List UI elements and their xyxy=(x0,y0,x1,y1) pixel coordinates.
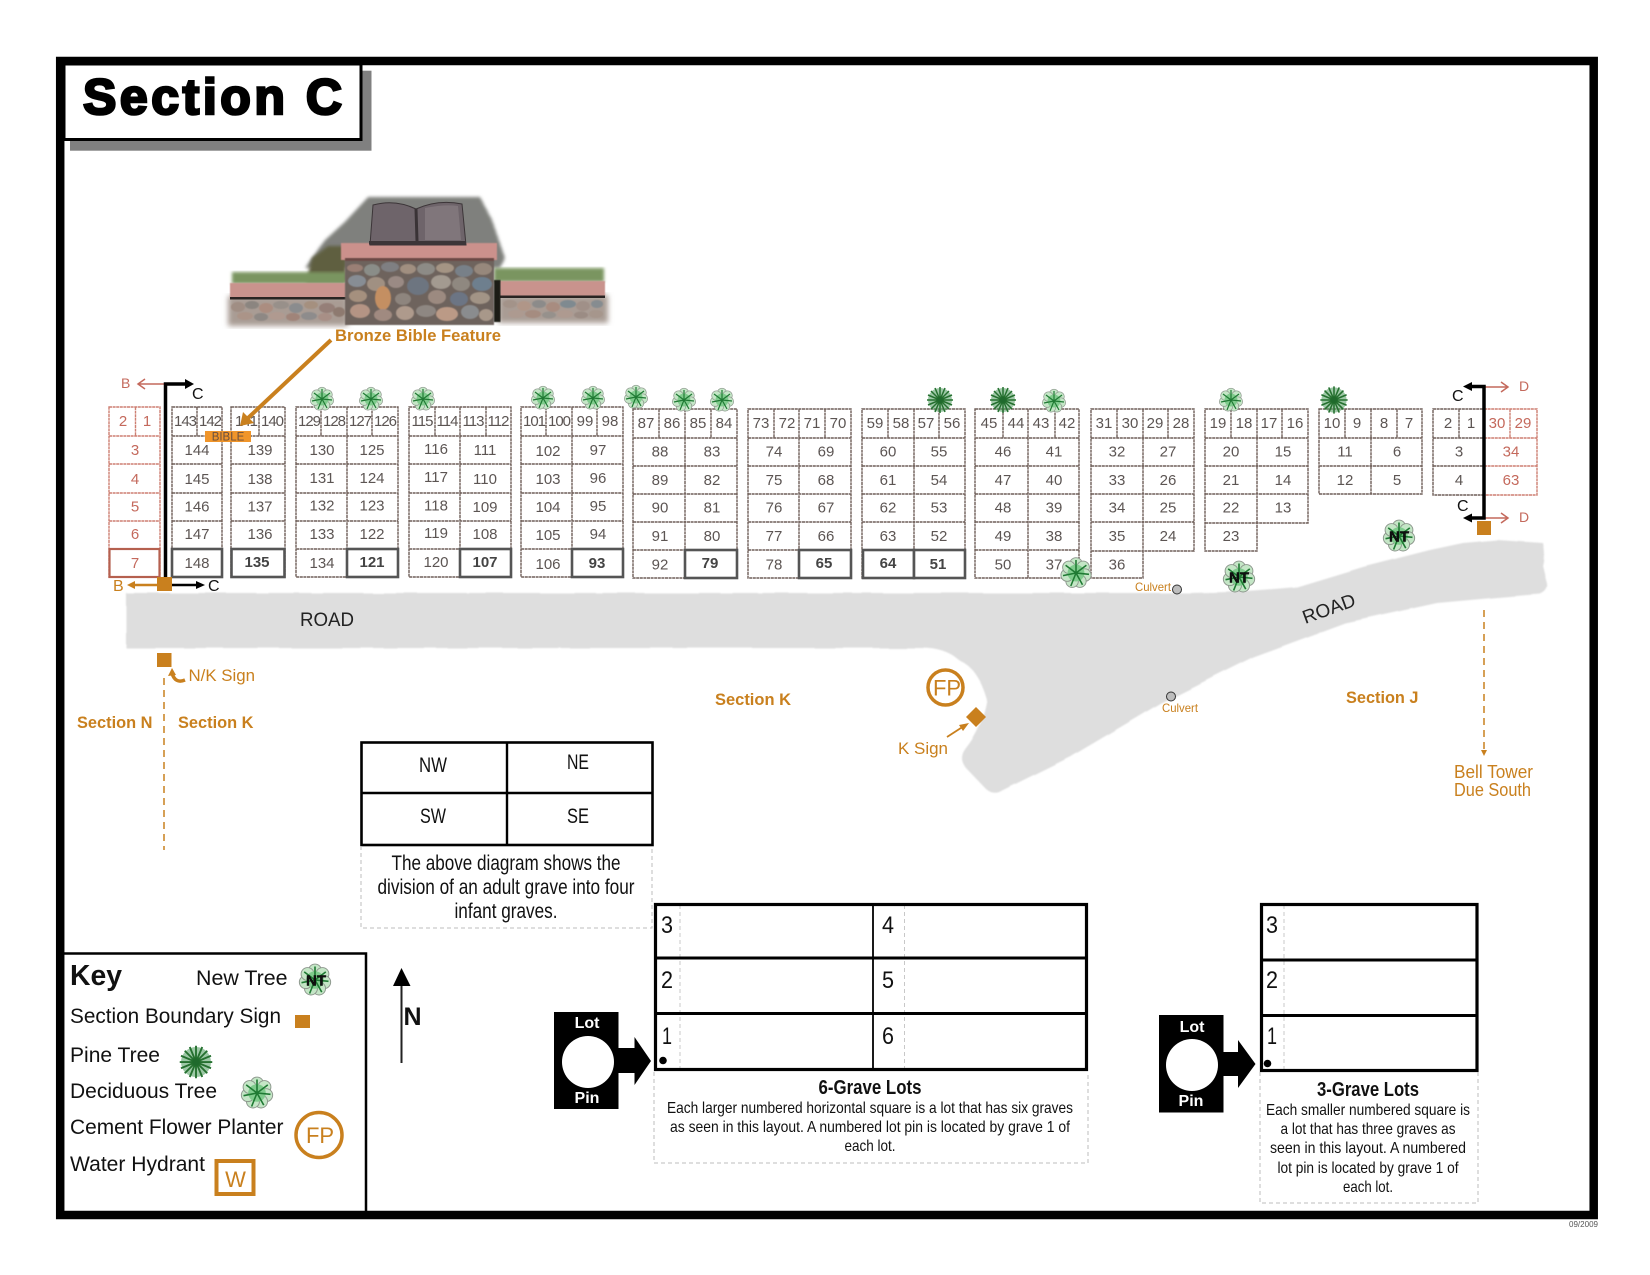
section boundary C/D right: D xyxy=(1519,509,1529,525)
lot block 93-106: 96 xyxy=(590,470,606,487)
lot block 93-106: 105 xyxy=(535,527,561,544)
lot block 65-78: 70 xyxy=(830,415,846,432)
key: water hydrant: W xyxy=(225,1167,246,1192)
3-grave lot diagram: 3 xyxy=(1266,912,1278,939)
lot block 93-106: 101 xyxy=(523,413,546,430)
lot block 65-78: 66 xyxy=(818,528,834,545)
lot block 121-134: 122 xyxy=(359,526,385,543)
section K center label: Section K xyxy=(715,691,791,709)
lot block 13-23: 15 xyxy=(1275,444,1291,461)
lot block red D lots: 30 xyxy=(1489,415,1505,432)
infant grave caption: division of an adult grave into four xyxy=(378,876,635,899)
pine tree xyxy=(990,387,1016,413)
lot block 65-78: 68 xyxy=(818,472,834,489)
lot block 107-120: 108 xyxy=(472,526,498,543)
lot pin icon, 3-grave: Lot xyxy=(1180,1019,1205,1036)
lot block: red B lots: 1 xyxy=(143,413,151,430)
title block xyxy=(64,64,372,151)
lot block 79-92: 87 xyxy=(638,415,654,432)
lot block 79-92 xyxy=(633,409,737,578)
deciduous tree xyxy=(581,386,605,409)
lot block 5-12: 12 xyxy=(1337,472,1353,489)
lot block 121-134: 121 xyxy=(359,554,385,571)
deciduous tree xyxy=(359,387,383,410)
lot block 107-120: 109 xyxy=(472,499,498,516)
pillar stones xyxy=(347,262,493,321)
sign and boundary B/C bottom: B xyxy=(113,578,124,595)
3-grave caption: seen in this layout. A numbered xyxy=(1270,1140,1466,1157)
6-grave caption: 6-Grave Lots xyxy=(818,1077,922,1099)
lot block 121-134: 123 xyxy=(359,498,385,514)
lot block 24-36: 25 xyxy=(1160,500,1176,517)
revision date: 09/2009 xyxy=(1569,1220,1599,1229)
lot block 24-36: 35 xyxy=(1109,528,1125,545)
lot block 143-148 xyxy=(172,407,222,577)
lot block 65-78: 67 xyxy=(818,500,834,517)
lot block 1-4 xyxy=(1433,409,1484,495)
photo: bronze bible feature xyxy=(228,197,608,326)
lot block 79-92: 81 xyxy=(704,500,720,517)
lot block 51-64: 57 xyxy=(918,415,934,432)
lot block 93-106: 93 xyxy=(589,555,605,572)
lot block 121-134: 129 xyxy=(298,413,321,430)
lot block 13-23: 21 xyxy=(1223,472,1239,489)
key: deciduous tree xyxy=(70,1077,273,1108)
new tree: NT xyxy=(1389,528,1409,546)
lot block 121-134: 133 xyxy=(309,526,335,543)
lot block 107-120: 118 xyxy=(424,498,448,514)
section boundary B/C top: C xyxy=(192,386,204,403)
deciduous tree xyxy=(710,388,734,411)
lot block 5-12: 7 xyxy=(1405,415,1413,432)
key: pine tree xyxy=(70,1044,212,1078)
lot block 107-120 xyxy=(409,407,511,577)
lot block 24-36: 28 xyxy=(1173,415,1189,432)
lot block 51-64: 64 xyxy=(880,555,897,572)
lot pin icon, 6-grave: Lot xyxy=(575,1015,600,1032)
3-grave caption xyxy=(1260,1072,1478,1203)
lot block 93-106: 97 xyxy=(590,442,606,459)
lot block 135-141: 135 xyxy=(244,554,270,571)
lot block 24-36: 24 xyxy=(1160,528,1176,545)
lot block 121-134: 126 xyxy=(374,413,397,430)
lot block 121-134: 132 xyxy=(309,498,335,514)
lot block 5-12: 10 xyxy=(1324,415,1340,432)
lot block 24-36: 33 xyxy=(1109,472,1125,489)
lot block 51-64: 56 xyxy=(944,415,960,432)
infant grave division diagram: SE xyxy=(567,805,589,828)
key: new tree: NT xyxy=(306,972,326,990)
section boundary B/C top xyxy=(121,375,204,581)
section K label: Section K xyxy=(178,714,254,732)
section J label: Section J xyxy=(1346,689,1418,707)
lot block 143-148: 144 xyxy=(184,442,210,459)
key: pine tree: Pine Tree xyxy=(70,1044,160,1067)
lot block 1-4: 1 xyxy=(1467,415,1475,432)
lot block 24-36: 32 xyxy=(1109,444,1125,461)
lot block 13-23: 17 xyxy=(1261,415,1277,432)
6-grave caption: as seen in this layout. A numbered lot pin is located by grave 1 of xyxy=(670,1119,1070,1136)
lot block 93-106: 98 xyxy=(602,413,618,430)
3-grave caption: each lot. xyxy=(1343,1179,1393,1196)
lot block 65-78: 69 xyxy=(818,444,834,461)
lot block 51-64: 63 xyxy=(880,528,896,545)
lot block 13-23 xyxy=(1205,409,1308,551)
lot block 24-36: 30 xyxy=(1122,415,1138,432)
lot block 107-120: 111 xyxy=(474,442,496,459)
section N label: Section N xyxy=(77,714,152,732)
deciduous tree xyxy=(310,387,334,410)
6-grave caption xyxy=(654,1072,1088,1163)
lot block 135-141: 138 xyxy=(247,471,273,488)
new tree xyxy=(1223,561,1255,592)
infant grave caption: infant graves. xyxy=(454,900,558,923)
title: Section C xyxy=(83,69,342,125)
culvert north: Culvert xyxy=(1135,580,1172,594)
road label: ROAD xyxy=(300,610,354,631)
lot block 37-50: 49 xyxy=(995,528,1011,545)
lot pin icon, 3-grave xyxy=(1159,1015,1256,1112)
key: cement flower planter: Cement Flower Planter xyxy=(70,1116,284,1139)
lot block 65-78: 71 xyxy=(804,415,820,432)
section boundary C/D right xyxy=(1452,378,1529,535)
lot block 24-36: 26 xyxy=(1160,472,1176,489)
lot block red D lots: 29 xyxy=(1515,415,1531,432)
lot block 79-92: 91 xyxy=(652,528,668,545)
lot block 79-92: 90 xyxy=(652,500,668,517)
left wall stones xyxy=(231,301,345,321)
6-grave lot diagram: 6 xyxy=(882,1023,894,1050)
bronze bible label: Bronze Bible Feature xyxy=(335,327,501,345)
lot block 51-64: 61 xyxy=(880,472,896,489)
lot block 93-106: 95 xyxy=(590,498,606,515)
bible tag: BIBLE xyxy=(212,432,245,444)
6-grave caption: each lot. xyxy=(844,1138,896,1155)
pine tree xyxy=(1320,386,1348,414)
lot block 51-64: 59 xyxy=(867,415,883,432)
flower planter FP: FP xyxy=(933,676,961,700)
key: deciduous tree: Deciduous Tree xyxy=(70,1080,217,1103)
key panel xyxy=(64,954,366,1211)
lot block 37-50: 40 xyxy=(1046,472,1062,489)
north arrow xyxy=(393,968,422,1063)
lot block 5-12: 8 xyxy=(1380,415,1388,432)
lot block 107-120: 107 xyxy=(472,554,498,571)
key: water hydrant: Water Hydrant xyxy=(70,1153,205,1176)
lot block 107-120: 116 xyxy=(424,441,448,458)
lot block 13-23: 14 xyxy=(1275,472,1291,489)
lot block 37-50: 43 xyxy=(1033,415,1049,432)
6-grave lot diagram: 4 xyxy=(882,912,894,939)
lot block 79-92: 92 xyxy=(652,556,668,573)
lot pin icon, 6-grave xyxy=(554,1012,651,1109)
arrow to bible xyxy=(240,340,331,426)
3-grave lot diagram xyxy=(1261,904,1478,1070)
bell tower direction: Due South xyxy=(1454,780,1531,800)
lot block 93-106: 99 xyxy=(577,413,593,430)
lot block 79-92: 79 xyxy=(702,555,718,572)
lot block 37-50: 46 xyxy=(995,444,1011,461)
lot block 24-36 xyxy=(1091,409,1194,578)
3-grave caption: Each smaller numbered square is xyxy=(1266,1102,1470,1119)
pine tree xyxy=(927,387,953,413)
lot block: red B lots: 2 xyxy=(119,413,127,430)
culvert south: Culvert xyxy=(1162,701,1199,715)
lot block 121-134: 130 xyxy=(309,442,335,459)
lot block 93-106: 94 xyxy=(590,526,606,543)
6-grave lot diagram xyxy=(655,904,1087,1070)
lot block 79-92: 89 xyxy=(652,472,668,489)
6-grave lot diagram: 2 xyxy=(661,967,673,994)
lot block 65-78: 72 xyxy=(779,415,795,432)
lot block red D lots: 34 xyxy=(1503,444,1519,461)
north arrow: N xyxy=(404,1003,422,1031)
key: water hydrant xyxy=(70,1153,254,1194)
lot block 1-4: 4 xyxy=(1455,472,1463,489)
new tree: NT xyxy=(1229,570,1249,586)
lot block 93-106: 100 xyxy=(548,413,571,430)
lot block 51-64: 55 xyxy=(931,444,947,461)
lot block 121-134: 128 xyxy=(323,413,346,430)
lot pin icon, 6-grave: Pin xyxy=(575,1090,599,1107)
N/K sign: N/K Sign xyxy=(188,666,255,685)
lot block 143-148: 148 xyxy=(184,555,210,572)
lot block: red B lots: 4 xyxy=(131,471,139,488)
lot block 135-141: 141 xyxy=(235,413,258,430)
deciduous tree xyxy=(411,387,435,410)
3-grave caption: a lot that has three graves as xyxy=(1280,1121,1456,1138)
lot block 13-23: 16 xyxy=(1287,415,1303,432)
section boundary B/C top: B xyxy=(121,375,130,391)
K sign marker xyxy=(898,707,986,758)
lot block 107-120: 119 xyxy=(424,525,448,542)
lot block 143-148: 143 xyxy=(174,413,197,430)
culvert south xyxy=(1162,692,1199,715)
6-grave lot diagram: 3 xyxy=(661,912,673,939)
new tree xyxy=(1383,520,1415,551)
bible tag xyxy=(205,431,251,444)
deciduous tree xyxy=(624,385,648,408)
lot block 51-64: 52 xyxy=(931,528,947,545)
lot block 79-92: 83 xyxy=(704,444,720,461)
lot block 37-50: 50 xyxy=(995,556,1011,573)
lot block 121-134: 131 xyxy=(309,470,335,487)
lot block 93-106: 102 xyxy=(535,443,561,460)
lot block 51-64 xyxy=(862,409,965,578)
lot block 65-78: 65 xyxy=(816,555,832,572)
key: new tree: New Tree xyxy=(196,967,288,990)
lot block 5-12: 11 xyxy=(1337,444,1353,461)
lot block 24-36: 36 xyxy=(1109,556,1125,573)
lot pin icon, 3-grave: Pin xyxy=(1179,1093,1203,1110)
sign and boundary B/C bottom xyxy=(113,577,220,595)
section boundary C/D right: D xyxy=(1519,378,1529,394)
lot block 13-23: 22 xyxy=(1223,500,1239,517)
lot block 121-134: 134 xyxy=(309,555,335,572)
infant grave division diagram xyxy=(361,742,652,845)
infant grave division diagram: SW xyxy=(420,805,446,828)
K sign marker: K Sign xyxy=(898,739,948,758)
lot block 107-120: 113 xyxy=(463,413,484,430)
infant grave division diagram: NW xyxy=(419,754,447,777)
key: new tree xyxy=(196,964,331,995)
lot block 65-78: 75 xyxy=(766,472,782,489)
lot block 51-64: 60 xyxy=(880,444,896,461)
lot block 121-134: 124 xyxy=(359,470,385,487)
section boundary C/D right: C xyxy=(1452,388,1464,405)
right wall stones xyxy=(503,300,603,318)
lot block 65-78: 73 xyxy=(753,415,769,432)
lot block 51-64: 58 xyxy=(893,415,909,432)
lot block 24-36: 27 xyxy=(1160,444,1176,461)
infant grave division diagram: NE xyxy=(567,751,589,774)
lot block 121-134: 127 xyxy=(349,413,372,430)
lot block 24-36: 34 xyxy=(1109,500,1125,517)
key: cement flower planter xyxy=(70,1112,342,1158)
lot block 5-12 xyxy=(1319,409,1422,494)
lot block 37-50: 41 xyxy=(1046,444,1062,461)
lot block 1-4: 2 xyxy=(1444,415,1452,432)
lot block 107-120: 112 xyxy=(488,413,509,430)
3-grave lot diagram: 1 xyxy=(1267,1023,1277,1050)
lot block 37-50: 38 xyxy=(1046,528,1062,545)
lot block 93-106: 104 xyxy=(535,499,561,516)
lot block 79-92: 85 xyxy=(690,415,706,432)
lot block 143-148: 147 xyxy=(184,526,210,543)
lot block 65-78: 76 xyxy=(766,500,782,517)
lot block 24-36: 31 xyxy=(1096,415,1112,432)
lot block: red B lots: 3 xyxy=(131,442,139,459)
lot block 37-50: 37 xyxy=(1046,556,1062,573)
deciduous tree xyxy=(672,388,696,411)
lot block 121-134 xyxy=(296,407,398,577)
road xyxy=(126,540,1547,793)
lot block 135-141: 136 xyxy=(247,526,273,543)
lot block 107-120: 114 xyxy=(437,413,458,430)
lot block 143-148: 142 xyxy=(199,413,222,430)
key heading: Key xyxy=(70,960,122,992)
lot block 24-36: 29 xyxy=(1147,415,1163,432)
lot block: red B lots: 5 xyxy=(131,498,139,516)
key: section boundary sign: Section Boundary Sign xyxy=(70,1005,281,1028)
3-grave caption: 3-Grave Lots xyxy=(1317,1079,1419,1101)
lot block 143-148: 146 xyxy=(184,498,210,516)
6-grave lot diagram: 1 xyxy=(662,1023,672,1050)
lot block 93-106 xyxy=(521,407,623,577)
flower planter FP xyxy=(928,670,963,705)
lot block 65-78: 78 xyxy=(766,556,782,573)
N/K sign xyxy=(157,653,255,850)
3-grave caption: lot pin is located by grave 1 of xyxy=(1278,1160,1459,1177)
lot block red D lots: 63 xyxy=(1503,472,1519,489)
lot block 135-141 xyxy=(231,407,285,577)
lot block 135-141: 137 xyxy=(247,498,273,516)
lot block 5-12: 5 xyxy=(1393,472,1401,489)
3-grave lot diagram: 2 xyxy=(1266,967,1278,994)
lot block 93-106: 106 xyxy=(535,556,561,573)
infant grave caption: The above diagram shows the xyxy=(392,852,620,875)
lot block 65-78: 77 xyxy=(766,528,782,545)
deciduous tree xyxy=(1042,389,1066,412)
lot block 143-148: 145 xyxy=(184,471,210,488)
lot block 1-4: 3 xyxy=(1455,444,1463,461)
lot block 135-141: 140 xyxy=(261,413,284,430)
lot block 65-78: 74 xyxy=(766,444,782,461)
lot block 79-92: 84 xyxy=(716,415,732,432)
lot block 107-120: 117 xyxy=(424,469,448,486)
lot block 37-50: 44 xyxy=(1008,415,1024,432)
lot block 51-64: 62 xyxy=(880,500,896,517)
road label angled: ROAD xyxy=(1300,590,1359,629)
lot block 107-120: 110 xyxy=(473,471,497,488)
lot block 37-50: 42 xyxy=(1059,415,1075,432)
sign and boundary B/C bottom: C xyxy=(208,578,220,595)
lot block 5-12: 9 xyxy=(1353,415,1361,432)
deciduous tree xyxy=(1219,388,1243,411)
bell tower direction: Bell Tower xyxy=(1454,762,1533,782)
lot block 13-23: 23 xyxy=(1223,528,1239,545)
lot block 51-64: 54 xyxy=(931,472,947,489)
lot block 121-134: 125 xyxy=(359,442,385,459)
deciduous tree large xyxy=(1061,558,1091,587)
lot block 51-64: 51 xyxy=(930,556,946,573)
6-grave caption: Each larger numbered horizontal square is a lot that has six graves xyxy=(667,1100,1073,1117)
lot block 51-64: 53 xyxy=(931,500,947,517)
lot block 37-50: 48 xyxy=(995,500,1011,517)
lot block 13-23: 20 xyxy=(1223,444,1239,461)
lot block 37-50 xyxy=(975,409,1079,578)
lot block 79-92: 86 xyxy=(664,415,680,432)
lot block 13-23: 18 xyxy=(1236,415,1252,432)
lot block red D lots xyxy=(1484,409,1537,495)
lot block 37-50: 45 xyxy=(981,415,997,432)
lot block 13-23: 13 xyxy=(1275,500,1291,517)
lot block: red B lots: 6 xyxy=(131,526,139,543)
bell tower direction xyxy=(1454,610,1533,800)
lot block 93-106: 103 xyxy=(535,471,561,488)
lot block 65-78 xyxy=(748,409,851,578)
lot block 79-92: 88 xyxy=(652,444,668,461)
lot block: red B lots xyxy=(109,407,160,577)
section boundary C/D right: C xyxy=(1457,498,1469,515)
lot block 107-120: 120 xyxy=(423,554,449,571)
lot block 135-141: 139 xyxy=(247,442,273,459)
lot block 79-92: 80 xyxy=(704,528,720,545)
key: cement flower planter: FP xyxy=(306,1123,334,1148)
deciduous tree xyxy=(531,386,555,409)
infant grave caption xyxy=(361,846,652,928)
lot block 107-120: 115 xyxy=(412,413,433,430)
lot block 37-50: 39 xyxy=(1046,500,1062,517)
lot block: red B lots: 7 xyxy=(131,555,139,572)
lot block 5-12: 6 xyxy=(1393,444,1401,461)
6-grave lot diagram: 5 xyxy=(882,967,894,994)
lot block 13-23: 19 xyxy=(1210,415,1226,432)
lot block 37-50: 47 xyxy=(995,472,1011,489)
lot block 79-92: 82 xyxy=(704,472,720,489)
